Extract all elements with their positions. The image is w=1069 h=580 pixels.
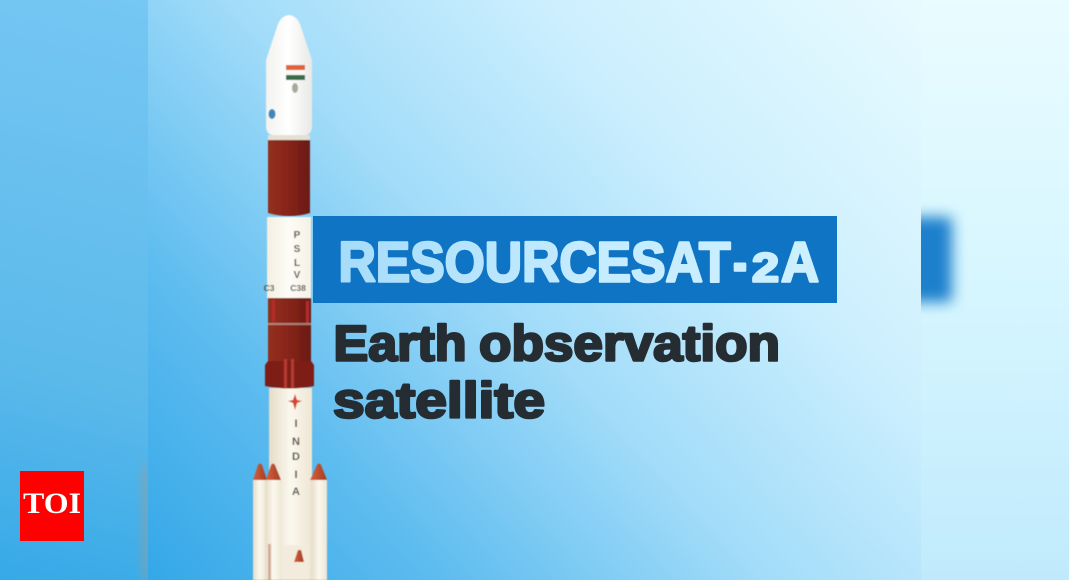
PSLV text: C38 — [290, 283, 306, 293]
banner title text: A — [781, 230, 819, 294]
PSLV text: L — [294, 258, 300, 269]
PSLV text: S — [294, 244, 301, 255]
banner title text: - — [733, 230, 747, 294]
red interstage — [268, 298, 311, 364]
strap-on boosters — [253, 464, 327, 580]
blurred blue banner remnant — [905, 217, 952, 302]
PSLV text: C3 — [264, 283, 275, 293]
red star logo — [288, 394, 302, 410]
INDIA text: D — [292, 451, 300, 463]
lower red ring — [265, 361, 314, 388]
INDIA text: I — [294, 418, 298, 430]
emblem — [292, 83, 298, 93]
upper red stage — [268, 140, 310, 216]
INDIA text: A — [292, 486, 300, 498]
collar — [268, 135, 310, 140]
subtitle — [333, 316, 780, 428]
payload fairing — [266, 15, 312, 135]
rocket — [253, 15, 327, 580]
subtitle: observation — [479, 316, 780, 372]
main gradient panel — [148, 0, 921, 580]
PSLV text — [264, 230, 306, 293]
TOI logo: TOI — [23, 487, 81, 520]
lower core stage — [269, 388, 312, 580]
small booster cone — [294, 550, 304, 562]
PSLV text: P — [294, 230, 301, 241]
INDIA text — [292, 418, 300, 498]
title banner — [313, 216, 837, 303]
flag — [286, 65, 305, 80]
INDIA text: N — [292, 436, 300, 448]
banner title text: 2 — [752, 244, 779, 290]
subtitle: Earth — [334, 316, 466, 372]
PSLV text: V — [294, 270, 301, 281]
white second stage — [267, 217, 311, 298]
subtitle: satellite — [333, 372, 545, 428]
banner title text: RESOURCESAT — [338, 230, 731, 294]
INDIA text: I — [294, 469, 298, 481]
right blurred background panel — [905, 0, 1069, 580]
left blurred background panel — [0, 0, 156, 580]
TOI logo — [20, 471, 84, 541]
